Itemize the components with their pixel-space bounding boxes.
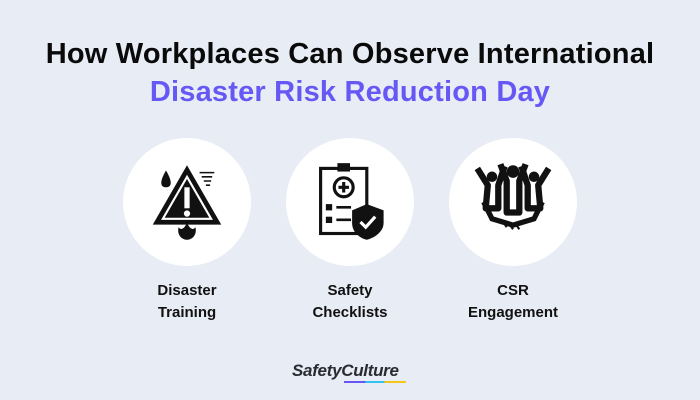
subtitle: Disaster Risk Reduction Day [150, 76, 550, 108]
label: CSR engagement: Engagement [468, 304, 558, 321]
label: safety checklists [312, 282, 388, 321]
label: CSR engagement: CSR [497, 282, 529, 299]
panel: CSR engagement icon [449, 138, 577, 266]
label: disaster training: Disaster [157, 282, 217, 299]
label: disaster training [157, 282, 217, 321]
label: safety checklists: Checklists [312, 304, 388, 321]
logo: SafetyCulture: SafetyCulture [292, 361, 399, 380]
label: CSR engagement [468, 282, 558, 321]
label: disaster training: Training [158, 304, 216, 321]
label: safety checklists: Safety [327, 282, 373, 299]
panel: disaster training icon [123, 138, 251, 266]
panel: safety checklists icon [286, 138, 414, 266]
title: How Workplaces Can Observe International [46, 38, 654, 70]
